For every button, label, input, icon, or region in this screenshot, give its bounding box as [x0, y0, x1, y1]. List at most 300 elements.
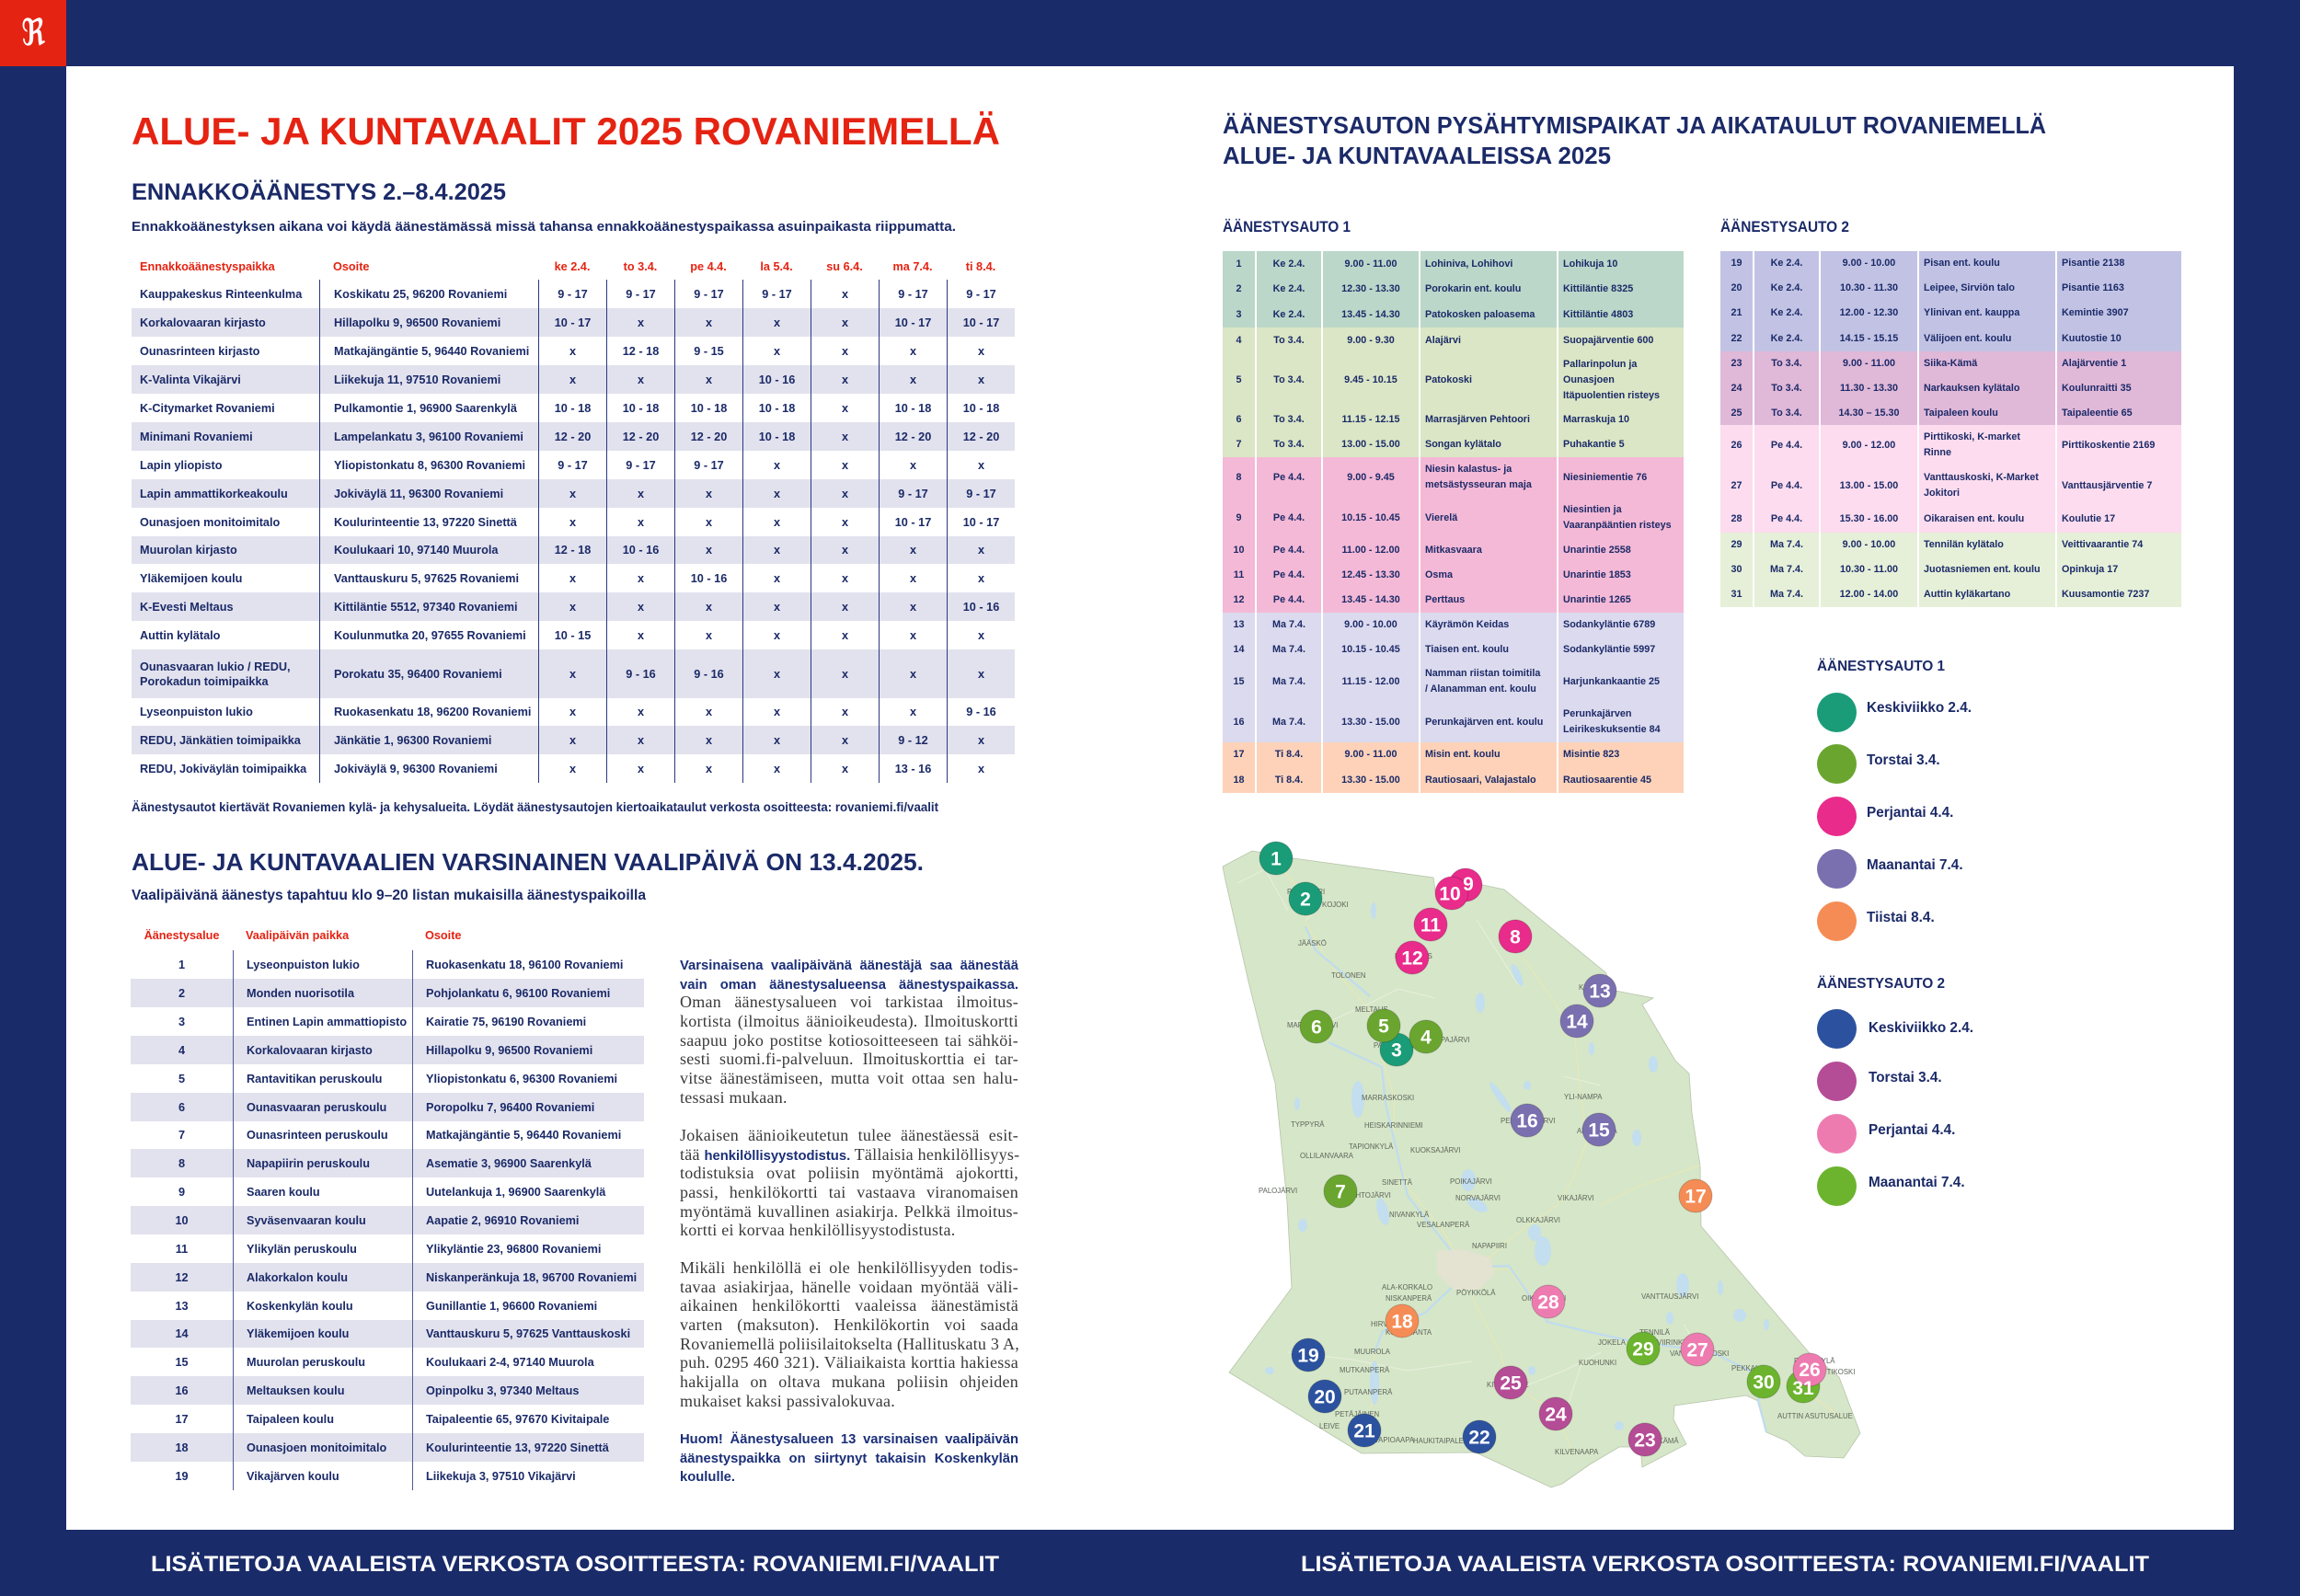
table: election day places: Rantavitikan peruskoulu [247, 1073, 382, 1085]
table: voting bus 1 schedule: Pe 4.4. [1273, 545, 1305, 556]
table: voting bus 2 schedule: Vanttausjärventie 7 [2062, 480, 2152, 491]
table: voting bus 1 schedule: 16 [1233, 716, 1244, 727]
table: election day places: Yläkemijoen koulu [247, 1327, 349, 1340]
table: advance voting places: x [842, 373, 848, 386]
table: voting bus 2 schedule: Auttin kyläkartano [1924, 589, 2010, 600]
marker 4: 4 [1420, 1027, 1432, 1049]
text block: own polling station [680, 959, 1018, 1107]
table: voting bus 1 schedule: Vierelä [1425, 511, 1457, 522]
table: voting bus 2 schedule: Pisantie 1163 [2062, 282, 2124, 293]
table: advance voting places: Koulukaari 10, 97140 Muurola [334, 544, 498, 557]
table: advance voting places: x [569, 373, 576, 386]
table: voting bus 1 schedule: Pe 4.4. [1273, 471, 1305, 482]
swatch: Friday [1817, 1114, 1857, 1154]
table: voting bus 1 schedule: Pallarinpolun ja [1563, 359, 1637, 370]
text block: own polling station: tessasi mukaan. [680, 1088, 788, 1107]
text block: note on area 13: koululle. [680, 1470, 735, 1485]
map place names: PERUNKAJÄRVI [1501, 1117, 1556, 1125]
text block: temporary ID: puh. 0295 460 321). Väliaikaista korttia hakiessa [680, 1353, 1018, 1372]
map place names: HAUKITAIPALE [1413, 1437, 1464, 1445]
table: voting bus 1 schedule: Sodankyläntie 5997 [1563, 644, 1655, 655]
map place names: NORVAJÄRVI [1455, 1194, 1501, 1202]
label: Friday: Perjantai 4.4. [1869, 1122, 1955, 1138]
table: voting bus 2 schedule: Kuusamontie 7237 [2062, 589, 2149, 600]
table: voting bus 2 schedule: 10.30 - 11.30 [1840, 282, 1898, 293]
table: voting bus 1 schedule: Ke 2.4. [1273, 258, 1305, 269]
table: voting bus 1 schedule: 10 [1233, 545, 1244, 556]
map place names: SUOPAJÄRVI [1425, 1036, 1470, 1044]
table: voting bus 1 schedule: Käyrämön Keidas [1425, 619, 1509, 630]
map place names: SINETTÄ [1382, 1178, 1413, 1187]
table: voting bus 1 schedule: Marrasjärven Pehtoori [1425, 414, 1530, 425]
table: advance voting places: x [706, 488, 712, 500]
table: advance voting places: 10 - 15 [555, 629, 591, 642]
table: advance voting places: 10 - 16 [623, 544, 659, 557]
text block: temporary ID: hakijalla on oltava mukana poliisin ohjeiden [680, 1372, 1018, 1391]
table: advance voting places: x [638, 600, 644, 613]
table: voting bus 1 schedule: 11.15 - 12.00 [1341, 675, 1400, 686]
marker 7 [1324, 1175, 1357, 1208]
marker 2: 2 [1300, 889, 1311, 911]
table: advance voting places: x [842, 431, 848, 443]
table: voting bus 2 schedule: 10.30 - 11.00 [1840, 564, 1898, 575]
table: advance voting places: 12 - 20 [691, 431, 727, 443]
table: advance voting places: x [910, 458, 916, 471]
marker 23: 23 [1634, 1430, 1656, 1452]
table: advance voting places: x [978, 629, 984, 642]
table: voting bus 2 schedule: Siika-Kämä [1924, 358, 1977, 369]
map place names: PERTTAUS [1395, 952, 1432, 960]
table: advance voting places: K-Valinta Vikajärvi [140, 373, 241, 386]
table: voting bus 2 schedule: 9.00 - 10.00 [1843, 539, 1895, 550]
table: advance voting places: REDU, Jänkätien toimipaikka [140, 734, 301, 747]
table: advance voting places: x [706, 600, 712, 613]
table: election day places: 9 [178, 1185, 185, 1198]
marker 21 [1348, 1414, 1381, 1447]
table: advance voting places: x [842, 515, 848, 528]
table: voting bus 1 schedule: Pe 4.4. [1273, 594, 1305, 605]
table: voting bus 2 schedule: Opinkuja 17 [2062, 564, 2118, 575]
table: advance voting places: Ounasvaaran lukio / REDU, [140, 660, 291, 673]
table: advance voting places: 9 - 12 [898, 734, 928, 747]
table: advance voting places: x [842, 762, 848, 775]
table: advance voting places: 9 - 17 [966, 287, 996, 300]
text block: own polling station: saapuu joko postitse kotiosoitteeseen tai sähköi- [680, 1031, 1018, 1050]
map place names: NAPAPIIRI [1472, 1242, 1507, 1250]
footnote: Äänestysautot kiertävät Rovaniemen kylä- ja kehysalueita. Löydät äänestysautojen kiertoaikataulut verkosta osoitteesta: rovaniemi.fi/vaalit [132, 800, 938, 814]
table: voting bus 2 schedule: Ke 2.4. [1771, 282, 1802, 293]
table: advance voting places: Lapin yliopisto [140, 458, 223, 471]
table: voting bus 2 schedule: Ylinivan ent. kauppa [1924, 307, 2019, 318]
text block: temporary ID: tavaa asiakirjaa, hänelle voidaan myöntää väli- [680, 1278, 1018, 1296]
table: voting bus 2 schedule: Ma 7.4. [1770, 564, 1803, 575]
table: voting bus 2 schedule: Pirttikoski, K-market [1924, 431, 2020, 442]
table: advance voting places: x [706, 706, 712, 718]
table: election day places: Gunillantie 1, 96600 Rovaniemi [426, 1299, 597, 1312]
map: voting bus stops in Rovaniemi [1222, 841, 1860, 1488]
table: election day places: Taipaleen koulu [247, 1413, 334, 1426]
marker 8 [1499, 920, 1532, 953]
map place names: NIVANKYLÄ [1389, 1211, 1430, 1219]
marker 24: 24 [1545, 1404, 1567, 1426]
table: voting bus 2 schedule: Kemintie 3907 [2062, 307, 2129, 318]
table: advance voting places: x [706, 373, 712, 386]
map place names: VIKAJÄRVI [1558, 1194, 1594, 1202]
table: voting bus 1 schedule: 4 [1236, 335, 1242, 346]
marker 15: 15 [1588, 1120, 1610, 1141]
table: voting bus 2 schedule: 11.30 - 13.30 [1840, 383, 1898, 394]
table: advance voting places: x [706, 316, 712, 329]
marker 15 [1582, 1113, 1616, 1146]
table: voting bus 1 schedule: Namman riistan toimitila [1425, 668, 1540, 679]
table: election day places: Taipaleentie 65, 97670 Kivitaipale [426, 1413, 609, 1426]
table: advance voting places: REDU, Jokiväylän toimipaikka [140, 762, 306, 775]
map place names: PEKKALA [1731, 1364, 1765, 1372]
swatch: Thursday [1817, 1062, 1857, 1101]
table: voting bus 1 schedule: Perttaus [1425, 594, 1465, 605]
table: voting bus 2 schedule: Ke 2.4. [1771, 307, 1802, 318]
table: election day places: 4 [178, 1043, 185, 1056]
table: voting bus 2 schedule: 12.00 - 14.00 [1840, 589, 1898, 600]
table: advance voting places: 9 - 17 [694, 287, 724, 300]
table: voting bus 1 schedule: 9.45 - 10.15 [1344, 373, 1397, 385]
table: voting bus 1 schedule: 13.45 - 14.30 [1341, 309, 1400, 320]
table: advance voting places: x [910, 373, 916, 386]
map place names: MUTKANPERÄ [1340, 1366, 1390, 1374]
text block: own polling station: sesti suomi.fi-palveluun. Ilmoituskorttia ei tar- [680, 1050, 1018, 1068]
table: advance voting places: Lapin ammattikorkeakoulu [140, 488, 288, 500]
table: advance voting places: x [774, 316, 780, 329]
table: advance voting places: Porokatu 35, 96400 Rovaniemi [334, 668, 502, 681]
map place names: PUTAANPERÄ [1344, 1388, 1393, 1396]
table: voting bus 1 schedule: Lohikuja 10 [1563, 258, 1617, 269]
table: advance voting places: su 6.4. [826, 259, 863, 272]
table: advance voting places: 9 - 17 [762, 287, 792, 300]
marker 13 [1583, 974, 1616, 1007]
table: voting bus 2 schedule: 15.30 - 16.00 [1840, 513, 1898, 524]
map place names: MELTAUS [1355, 1005, 1388, 1014]
table: election day places: Saaren koulu [247, 1185, 320, 1198]
table: election day places: 7 [178, 1129, 185, 1142]
marker 16 [1511, 1104, 1544, 1137]
table: advance voting places: Yläkemijoen koulu [140, 572, 242, 585]
map place names: PIRTTIKYLÄ [1794, 1357, 1835, 1365]
table: voting bus 2 schedule: 29 [1731, 539, 1742, 550]
table: voting bus 1 schedule: Perunkajärven [1563, 708, 1631, 719]
table: advance voting places: 10 - 16 [691, 572, 727, 585]
table: advance voting places: x [774, 734, 780, 747]
table: advance voting places: Muurolan kirjasto [140, 544, 237, 557]
table: voting bus 1 schedule: Misintie 823 [1563, 749, 1619, 760]
marker 5: 5 [1378, 1016, 1389, 1038]
table: advance voting places: x [842, 316, 848, 329]
table: advance voting places: x [638, 706, 644, 718]
swatch: Monday [1817, 849, 1857, 889]
table: advance voting places: Jokiväylä 9, 96300 Rovaniemi [334, 762, 498, 775]
table: voting bus 1 schedule: Ma 7.4. [1272, 619, 1305, 630]
table: voting bus 1 schedule: Ma 7.4. [1272, 675, 1305, 686]
table: voting bus 2 schedule: Ke 2.4. [1771, 333, 1802, 344]
table: advance voting places: x [842, 572, 848, 585]
table: advance voting places: 12 - 20 [895, 431, 931, 443]
marker 13: 13 [1589, 981, 1611, 1003]
map place names: MARRASJÄRVI [1287, 1021, 1338, 1029]
table: advance voting places: x [910, 600, 916, 613]
table: voting bus 2 schedule: Ma 7.4. [1770, 539, 1803, 550]
marker 10 [1435, 877, 1468, 910]
marker 18 [1386, 1304, 1419, 1338]
table: advance voting places: x [638, 316, 644, 329]
map place names: PÖYKKÖLÄ [1456, 1289, 1496, 1297]
table: advance voting places: 10 - 17 [555, 316, 591, 329]
table: advance voting places: Vanttauskuru 5, 97625 Rovaniemi [334, 572, 519, 585]
marker 20 [1308, 1380, 1341, 1413]
table: advance voting places: K-Evesti Meltaus [140, 600, 234, 613]
marker 1 [1259, 842, 1293, 875]
marker 30 [1747, 1365, 1780, 1398]
map place names: MUUROLA [1354, 1348, 1391, 1356]
table: voting bus 2 schedule: Koulunraitti 35 [2062, 383, 2132, 394]
table: voting bus 1 schedule: Niesintien ja [1563, 504, 1622, 515]
table: election day places: Koskenkylän koulu [247, 1299, 353, 1312]
table: voting bus 2 schedule: 13.00 - 15.00 [1840, 480, 1898, 491]
label: Thursday: Torstai 3.4. [1869, 1070, 1942, 1085]
legend heading 2: ÄÄNESTYSAUTO 2 [1817, 976, 1945, 992]
table: voting bus 1 schedule: / Alanamman ent. koulu [1425, 683, 1536, 695]
table: advance voting places: Jänkätie 1, 96300 Rovaniemi [334, 734, 491, 747]
table: advance voting places: x [978, 668, 984, 681]
table: advance voting places: Lampelankatu 3, 96100 Rovaniemi [334, 431, 523, 443]
marker 31 number: 31 [1792, 1378, 1814, 1399]
table: voting bus 2 schedule: 14.15 - 15.15 [1840, 333, 1898, 344]
table: voting bus 1 schedule: 2 [1236, 283, 1242, 294]
table: advance voting places: Jokiväylä 11, 96300 Rovaniemi [334, 488, 503, 500]
table: election day places: Uutelankuja 1, 96900 Saarenkylä [426, 1185, 605, 1198]
map place names: POIKAJÄRVI [1450, 1177, 1492, 1186]
table: advance voting places: 9 - 17 [966, 488, 996, 500]
table: advance voting places: x [910, 668, 916, 681]
table: election day places: 1 [178, 959, 185, 971]
table: advance voting places: 9 - 17 [626, 458, 656, 471]
map place names: KUOHUNKI [1579, 1359, 1616, 1367]
footer link left: LISÄTIETOJA VAALEISTA VERKOSTA OSOITTEESTA: ROVANIEMI.FI/VAALIT [151, 1552, 999, 1577]
table: election day places [131, 929, 644, 1490]
table: voting bus 2 schedule: Ma 7.4. [1770, 589, 1803, 600]
table: voting bus 1 schedule: Ti 8.4. [1275, 775, 1303, 786]
text block: identification: passi, henkilökortti tai vastaava viranomaisen [680, 1183, 1018, 1201]
table: advance voting places: x [774, 458, 780, 471]
table: voting bus 1 schedule: 12 [1233, 594, 1244, 605]
table: advance voting places: x [978, 544, 984, 557]
marker 14 [1560, 1005, 1593, 1038]
table: voting bus 2 schedule: 23 [1731, 358, 1742, 369]
table: advance voting places: Koskikatu 25, 96200 Rovaniemi [334, 287, 507, 300]
table: voting bus 2 schedule: Pirttikoskentie 2169 [2062, 440, 2155, 451]
text block: own polling station: vitse äänestämiseen, mutta voit ottaa sen halu- [680, 1069, 1018, 1087]
table: advance voting places: 10 - 17 [895, 316, 931, 329]
marker 12 [1396, 941, 1429, 974]
table: voting bus 2 schedule: Jokitori [1924, 488, 1960, 499]
marker 17: 17 [1685, 1187, 1707, 1207]
marker 19 [1292, 1338, 1325, 1372]
table: advance voting places: x [910, 572, 916, 585]
table: advance voting places: Auttin kylätalo [140, 629, 220, 642]
marker 10: 10 [1439, 883, 1461, 905]
map place names: HIRVAS [1371, 1320, 1397, 1328]
text block: identification: Jokaisen äänioikeutetun tulee äänestäessä esit- [680, 1126, 1018, 1144]
label: Monday: Maanantai 7.4. [1869, 1175, 1965, 1190]
table: voting bus 2 schedule: Rinne [1924, 447, 1951, 458]
table: voting bus 1 schedule: Ounasjoen [1563, 373, 1615, 385]
marker 1: 1 [1271, 848, 1282, 870]
table: voting bus 2 schedule: 22 [1731, 333, 1742, 344]
marker 22: 22 [1468, 1428, 1490, 1448]
marker 22 [1463, 1420, 1496, 1453]
marker 27: 27 [1686, 1339, 1708, 1361]
table: voting bus 1 schedule: Pe 4.4. [1273, 569, 1305, 580]
table: election day places: Kairatie 75, 96190 Rovaniemi [426, 1016, 586, 1028]
table: advance voting places: la 5.4. [760, 259, 793, 272]
table: advance voting places: x [910, 344, 916, 357]
table: advance voting places: x [774, 762, 780, 775]
table: advance voting places: x [774, 629, 780, 642]
table: advance voting places: ke 2.4. [555, 259, 590, 272]
swatch: Wednesday [1817, 693, 1857, 732]
advance voting intro: Ennakkoäänestyksen aikana voi käydä äänestämässä missä tahansa ennakkoäänestyspaikassa asuinpaikasta riippumatta. [132, 220, 956, 235]
table: advance voting places: x [638, 373, 644, 386]
table: voting bus 2 schedule: 24 [1731, 383, 1742, 394]
table: voting bus 1 schedule: Ke 2.4. [1273, 309, 1305, 320]
table: advance voting places: x [842, 706, 848, 718]
table: voting bus 2 schedule: 9.00 - 11.00 [1843, 358, 1895, 369]
marker 2 [1289, 882, 1322, 915]
table: advance voting places: 10 - 18 [963, 401, 999, 414]
map place names: POROKARI [1287, 888, 1325, 896]
marker 19: 19 [1297, 1345, 1319, 1367]
table: voting bus 1 schedule: 17 [1233, 749, 1244, 760]
table: voting bus 2 schedule: Taipaleen koulu [1924, 407, 1998, 418]
table: voting bus 1 schedule: 18 [1233, 775, 1244, 786]
map place names: KILVENAAPA [1555, 1448, 1599, 1456]
table: voting bus 1 schedule: Itäpuolentien risteys [1563, 390, 1660, 401]
map area [1223, 851, 1860, 1487]
marker 31 [1787, 1370, 1820, 1403]
table: advance voting places: ti 8.4. [966, 259, 995, 272]
table: advance voting places: x [774, 344, 780, 357]
table: advance voting places: Ounasjoen monitoimitalo [140, 515, 280, 528]
table: election day places: 14 [175, 1327, 189, 1340]
table: voting bus 1 schedule: Vaaranpääntien risteys [1563, 520, 1672, 531]
map place names: PIRTTIKOSKI [1811, 1368, 1855, 1376]
table: advance voting places: 10 - 17 [963, 515, 999, 528]
title: ALUE- JA KUNTAVAALIT 2025 ROVANIEMELLÄ [132, 109, 1000, 152]
marker 18: 18 [1391, 1312, 1413, 1332]
table: advance voting places: Yliopistonkatu 8, 96300 Rovaniemi [334, 458, 525, 471]
table: voting bus 1 schedule: Suopajärventie 600 [1563, 335, 1653, 346]
table: advance voting places: x [842, 458, 848, 471]
marker 11 [1414, 908, 1447, 941]
table: advance voting places: 12 - 20 [623, 431, 659, 443]
text block: temporary ID: aikainen henkilökortti vaaleissa äänestämistä [680, 1296, 1018, 1315]
marker 14: 14 [1566, 1012, 1588, 1032]
map place names: PATOKOSKI [1374, 1041, 1414, 1050]
table: voting bus 2 schedule: 12.00 - 12.30 [1840, 307, 1898, 318]
table: voting bus 1 schedule: Unarintie 1265 [1563, 594, 1631, 605]
table: advance voting places: 12 - 18 [555, 544, 591, 557]
table: voting bus 2 schedule: Välijoen ent. koulu [1924, 333, 2011, 344]
table: election day places: 17 [175, 1413, 189, 1426]
table: voting bus 1 schedule: Ke 2.4. [1273, 283, 1305, 294]
table: advance voting places: x [569, 515, 576, 528]
table: advance voting places: Osoite [333, 259, 369, 272]
table: election day places: Alakorkalon koulu [247, 1271, 348, 1284]
table: voting bus 1 schedule: Niesiniementie 76 [1563, 471, 1647, 482]
table: voting bus 1 schedule: 1 [1236, 258, 1242, 269]
text block: note on area 13 [680, 1431, 1018, 1485]
marker 11: 11 [1420, 914, 1441, 936]
text block: identification: kortti ei korvaa henkilöllisyystodistusta. [680, 1221, 955, 1239]
text block: note on area 13: Huom! Äänestysalueen 13 varsinaisen vaalipäivän [680, 1432, 1018, 1447]
table: advance voting places: x [978, 458, 984, 471]
map place names: TENNILÄ [1639, 1328, 1671, 1337]
table: election day places: Ounasvaaran peruskoulu [247, 1100, 386, 1113]
table: advance voting places: 10 - 17 [895, 515, 931, 528]
table: election day places: 13 [175, 1299, 189, 1312]
table: advance voting places: x [978, 762, 984, 775]
table: voting bus 1 schedule: 6 [1236, 414, 1242, 425]
table: election day places: 6 [178, 1100, 185, 1113]
table: advance voting places: x [910, 629, 916, 642]
table: voting bus 1 schedule: To 3.4. [1273, 373, 1305, 385]
marker 4 [1409, 1020, 1443, 1053]
table: advance voting places: 10 - 18 [759, 431, 795, 443]
table: advance voting places: to 3.4. [624, 259, 657, 272]
table: advance voting places: x [910, 544, 916, 557]
table: advance voting places: 10 - 16 [963, 600, 999, 613]
legend: voting bus 1 [1817, 659, 1972, 941]
table: voting bus 2 schedule: 26 [1731, 440, 1742, 451]
table: election day places: 5 [178, 1073, 185, 1085]
table: voting bus 1 schedule: Niesin kalastus- ja [1425, 464, 1512, 475]
table: voting bus 2 schedule: 9.00 - 12.00 [1843, 440, 1895, 451]
table: voting bus 1 schedule: 14 [1233, 644, 1244, 655]
table: voting bus 2 schedule: Tennilän kylätalo [1924, 539, 2004, 550]
table: advance voting places: Kauppakeskus Rinteenkulma [140, 287, 302, 300]
table: advance voting places: x [842, 488, 848, 500]
table: voting bus 2 schedule: Pe 4.4. [1771, 440, 1802, 451]
table: election day places: Vaalipäivän paikka [246, 929, 349, 942]
table: voting bus 2 schedule: Leipee, Sirviön talo [1924, 282, 2015, 293]
text block: identification: todistuksia ovat poliisin myöntämä ajokortti, [680, 1164, 1018, 1182]
text block: own polling station: Oman äänestysalueen voi tarkistaa ilmoitus- [680, 993, 1018, 1011]
table: voting bus 2 schedule: Juotasniemen ent. koulu [1924, 564, 2041, 575]
table: voting bus 2 schedule: To 3.4. [1771, 383, 1802, 394]
table: voting bus 1 schedule: 10.15 - 10.45 [1341, 644, 1400, 655]
table: voting bus 1 schedule: 12.45 - 13.30 [1341, 569, 1400, 580]
table: election day places: Meltauksen koulu [247, 1384, 344, 1396]
table: advance voting places: x [706, 762, 712, 775]
table: voting bus 1 schedule: Pe 4.4. [1273, 511, 1305, 522]
text block: temporary ID: Mikäli henkilöllä ei ole henkilöllisyyden todis- [680, 1258, 1018, 1277]
table: voting bus 1 schedule: 11 [1234, 569, 1244, 580]
table: advance voting places: Pulkamontie 1, 96900 Saarenkylä [334, 401, 517, 414]
table: election day places: Pohjolankatu 6, 96100 Rovaniemi [426, 986, 610, 999]
stop markers [1259, 842, 1826, 1456]
table: advance voting places: x [774, 544, 780, 557]
table: voting bus 2 schedule: 30 [1731, 564, 1742, 575]
table: advance voting places: Koulunmutka 20, 97655 Rovaniemi [334, 629, 526, 642]
text block: identification: tää henkilöllisyystodistus. Tällaisia henkilöllisyys- [680, 1145, 1019, 1164]
